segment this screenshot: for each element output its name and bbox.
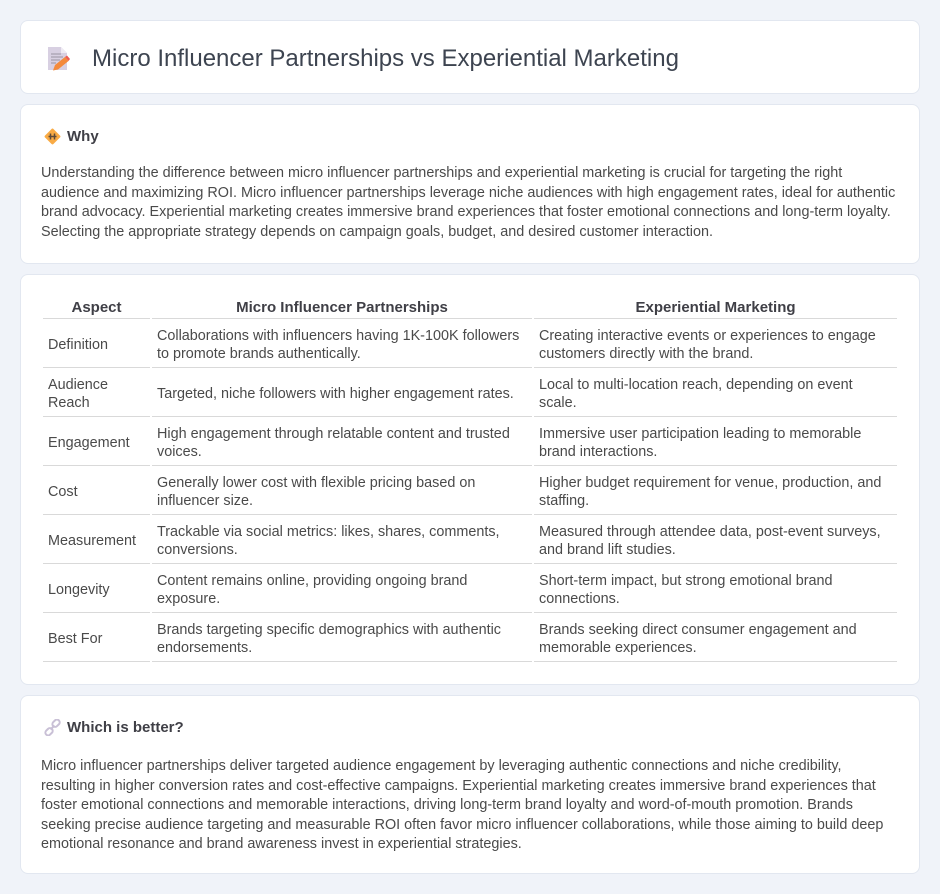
table: comparison: High engagement through relatable content and trusted xyxy=(157,426,510,442)
table: comparison: staffing. xyxy=(539,492,589,508)
table: comparison: brand interactions. xyxy=(539,444,657,460)
table: comparison: Content remains online, providing ongoing brand xyxy=(157,572,467,588)
table: comparison: conversions. xyxy=(157,542,238,558)
icon: document with pencil xyxy=(48,47,70,70)
table: comparison: Micro Influencer Partnerships xyxy=(236,299,448,316)
table: comparison: scale. xyxy=(539,394,577,410)
table: comparison: memorable experiences. xyxy=(539,640,697,656)
table: comparison: endorsements. xyxy=(157,640,252,656)
table: comparison: Collaborations with influencers having 1K-100K followers xyxy=(157,328,519,344)
table: comparison: to promote brands authentically. xyxy=(157,346,361,362)
heading: which is better: Which is better? xyxy=(67,719,184,736)
table: comparison: voices. xyxy=(157,444,202,460)
icon: warning diamond xyxy=(44,128,60,144)
table: comparison: Creating interactive events or experiences to engage xyxy=(539,328,876,344)
heading: page title: Micro Influencer Partnerships vs Experiential Marketing xyxy=(92,45,679,72)
panel: comparison table xyxy=(20,274,920,685)
table: comparison: Reach xyxy=(48,394,90,410)
panel: which is better xyxy=(20,695,920,874)
heading: why: Why xyxy=(67,128,99,145)
text block: why paragraph: Understanding the difference between micro influencer partnerships and experiential marketing is crucial for targeting the right xyxy=(41,165,842,181)
text block: verdict paragraph xyxy=(41,758,883,852)
table: comparison: and brand lift studies. xyxy=(539,542,676,558)
table: comparison: Best For xyxy=(48,630,102,646)
text block: why paragraph xyxy=(41,165,895,240)
table: comparison: Aspect xyxy=(71,299,122,316)
table: comparison xyxy=(43,299,897,662)
table: comparison: Short-term impact, but strong emotional brand xyxy=(539,572,833,588)
text block: verdict paragraph: seeking precise audience targeting and measurable ROI often favor micro influencer collaborations, while those aiming to build deep xyxy=(41,817,883,833)
table: comparison: Measured through attendee data, post-event surveys, xyxy=(539,524,881,540)
table: comparison: connections. xyxy=(539,590,620,606)
text block: verdict paragraph: resulting in higher conversion rates and cost-effective campaigns. Experiential marketing creates immersive brand experiences that xyxy=(41,778,876,794)
icon: chain link xyxy=(44,719,61,736)
panel: title xyxy=(20,20,920,94)
table: comparison: Higher budget requirement for venue, production, and xyxy=(539,474,881,490)
text block: why paragraph: audience and maximizing ROI. Micro influencer partnerships leverage niche audiences with high engagement rates, ideal for authentic xyxy=(41,185,895,201)
table: comparison: customers directly with the brand. xyxy=(539,346,753,362)
table: comparison: Generally lower cost with flexible pricing based on xyxy=(157,474,475,490)
table: comparison: exposure. xyxy=(157,590,220,606)
table: comparison: Local to multi-location reach, depending on event xyxy=(539,376,853,392)
table: comparison: influencer size. xyxy=(157,492,253,508)
table: comparison: Brands seeking direct consumer engagement and xyxy=(539,622,857,638)
table: comparison: Trackable via social metrics: likes, shares, comments, xyxy=(157,524,500,540)
table: comparison: Audience xyxy=(48,376,108,392)
text block: why paragraph: Selecting the appropriate strategy depends on campaign goals, budget, and desired customer interaction. xyxy=(41,224,713,240)
panel: why xyxy=(20,104,920,264)
table: comparison: Engagement xyxy=(48,434,130,450)
table: comparison: Cost xyxy=(48,484,78,500)
table: comparison: Definition xyxy=(48,336,108,352)
table: comparison: Longevity xyxy=(48,582,110,598)
table: comparison: Immersive user participation leading to memorable xyxy=(539,426,861,442)
table: comparison: Measurement xyxy=(48,532,136,548)
text block: verdict paragraph: Micro influencer partnerships deliver targeted audience engagement by leveraging authentic connections and niche credibility, xyxy=(41,758,842,774)
table: comparison: Targeted, niche followers with higher engagement rates. xyxy=(157,386,514,402)
text block: verdict paragraph: foster emotional connections and memorable interactions, driving long-term brand loyalty and word-of-mouth promotion. Brands xyxy=(41,797,853,813)
table: comparison: Brands targeting specific demographics with authentic xyxy=(157,622,501,638)
table: comparison: Experiential Marketing xyxy=(635,299,796,316)
text block: verdict paragraph: emotional resonance and brand awareness invest in experiential strategies. xyxy=(41,836,522,852)
text block: why paragraph: brand advocacy. Experiential marketing creates immersive brand experiences that foster emotional connections and long-term loyalty. xyxy=(41,204,891,220)
